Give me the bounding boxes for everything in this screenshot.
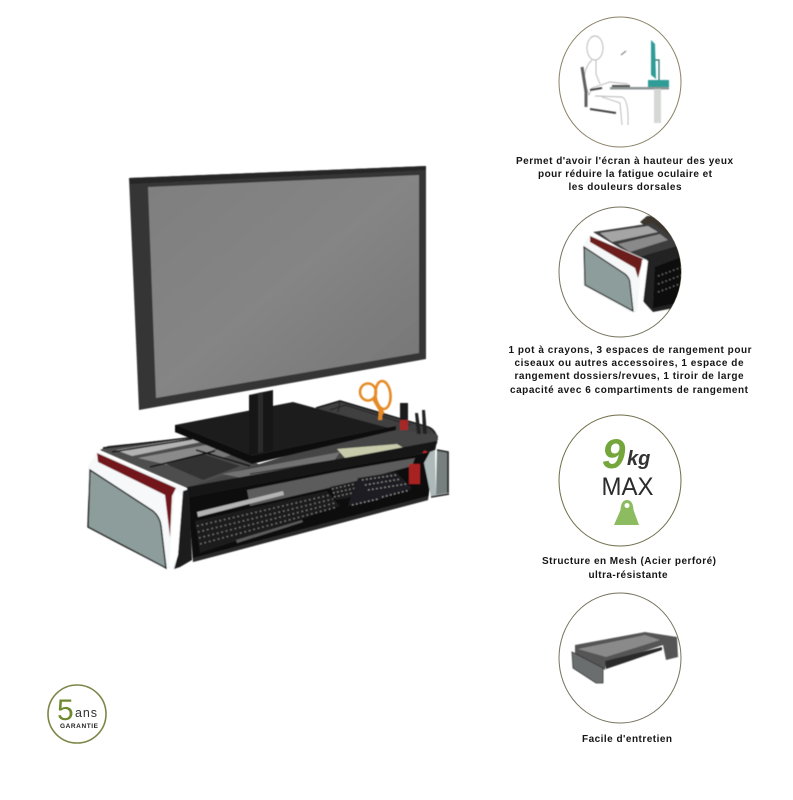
caption: storage: 1 pot à crayons, 3 espaces de rangement pour — [508, 345, 752, 356]
riser tray — [100, 401, 449, 562]
numeric keypad — [330, 472, 412, 506]
main keyboard — [195, 491, 340, 553]
chair — [582, 67, 586, 107]
caption: easy maintenance: Facile d'entretien — [582, 734, 672, 745]
pens — [400, 403, 427, 434]
caption: ergonomics — [516, 156, 733, 193]
front rail — [187, 441, 437, 499]
red clip detail — [423, 451, 427, 455]
feature circle: ergonomics — [559, 17, 681, 147]
left document holder — [88, 452, 192, 569]
feature circle: 9 kg max — [559, 415, 681, 546]
seated person — [584, 36, 628, 125]
drawer — [188, 451, 435, 562]
right shelf top — [187, 428, 437, 488]
numeral 5: 5 — [57, 694, 74, 727]
warranty badge — [48, 685, 106, 743]
caption: ergonomics: les douleurs dorsales — [568, 182, 682, 193]
caption: storage: ciseaux ou autres accessoires, 1 espace de — [514, 358, 744, 369]
kg unit: kg — [627, 448, 650, 470]
ans: ans — [75, 706, 97, 720]
caption: storage: rangement dossiers/revues, 1 tiroir de large — [514, 371, 744, 382]
rear mesh shelf — [316, 401, 438, 444]
icon: weight — [614, 500, 639, 525]
small riser — [572, 632, 678, 683]
caption: mesh structure: Structure en Mesh (Acier perforé) — [542, 556, 716, 567]
left shelf top — [100, 436, 262, 488]
scissors in orange — [360, 380, 392, 420]
caption: storage: capacité avec 6 compartiments de rangement — [510, 385, 749, 396]
9 numeral: 9 — [602, 430, 626, 477]
monitor stand base — [175, 402, 396, 464]
caption: mesh structure: ultra-résistante — [588, 570, 668, 581]
desk and monitor — [610, 87, 669, 90]
caption: mesh structure — [542, 556, 716, 581]
feature circle: storage detail — [559, 207, 690, 337]
red folder in pen slot — [409, 464, 420, 484]
gray mesh panel — [88, 470, 166, 568]
eye line — [621, 51, 626, 55]
MAX label: MAX — [602, 473, 654, 501]
caption: storage — [508, 345, 752, 396]
monitor pole — [249, 390, 273, 455]
product illustration: monitor on mesh riser — [88, 166, 449, 569]
garantie: GARANTIE — [60, 723, 99, 730]
monitor bezel — [129, 166, 426, 410]
monitor screen — [148, 175, 419, 398]
caption: ergonomics: Permet d'avoir l'écran à hauteur des yeux — [516, 156, 733, 167]
feature circle: easy maintenance — [559, 593, 681, 723]
right pen holder — [424, 450, 449, 497]
caption: ergonomics: pour réduire la fatigue oculaire et — [538, 169, 713, 180]
